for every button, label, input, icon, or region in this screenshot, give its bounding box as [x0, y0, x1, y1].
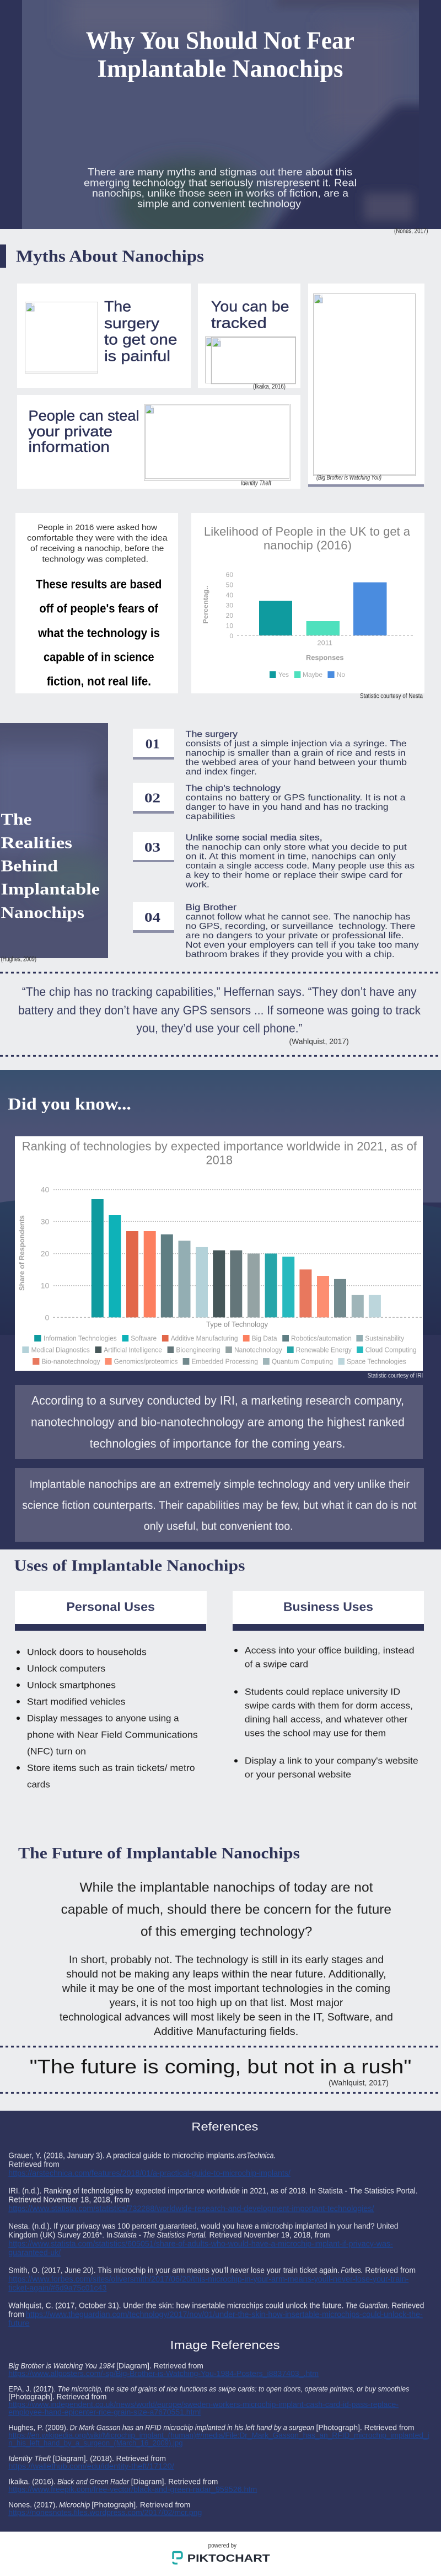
- image reference: Nones: [Photograph]. Retrieved from: [92, 2500, 190, 2509]
- y axis labels: 20: [41, 1249, 50, 1258]
- list: business uses: Access into your office building, instead: [245, 1645, 415, 1656]
- image reference: Hughes: n_his_left_hand_by_a_surgeon_(March_16_2009).jpg: [8, 2438, 183, 2447]
- chart title: Ranking of technologies by expected importance worldwide in 2021, as of: [22, 1140, 417, 1153]
- myth text: [104, 298, 177, 364]
- panel: private information myth: [17, 395, 300, 489]
- x axis label: 2011: [318, 639, 332, 647]
- panel: personal uses header: [15, 1591, 207, 1631]
- callout: IRI survey: According to a survey conducted by IRI, a marketing research company,: [31, 1394, 404, 1408]
- reference: IRI: https://www.statista.com/statistics/732288/worldwide-research-and-development-important-technologies/: [8, 2204, 374, 2213]
- y axis labels: [226, 571, 233, 640]
- reference: Nesta: https://www.statista.com/statistics/605051/share-of-adults-who-would-have-a-microchip-implant-if-privacy-was-: [8, 2239, 393, 2248]
- reference: Smith: [8, 2265, 416, 2292]
- reality 02: danger to have in you hand and has no tracking: [186, 803, 389, 812]
- image reference: Identity Theft: [8, 2454, 174, 2470]
- title: Why You Should Not Fear: [86, 26, 354, 54]
- list: personal uses: cards: [27, 1779, 50, 1790]
- reference: Smith: Retrieved from: [365, 2265, 416, 2275]
- image reference: Nones: https://nonesnotes.files.wordpress.com/2017/02/mcr.png: [8, 2508, 202, 2516]
- y axis labels: 0: [229, 632, 233, 640]
- callout: simple technology: science fiction counterparts. Their capabilities may be few, but what it can do is not: [22, 1500, 417, 1512]
- x axis title: Type of Technology: [206, 1319, 268, 1328]
- heading: references: References: [191, 2121, 258, 2134]
- image reference: EPA: The microchip, the size of grains of rice functions as swipe cards: to open doors, operate printers, or buy smoothies: [58, 2384, 409, 2393]
- chart title: 2018: [206, 1153, 233, 1167]
- reference: Grauer: Grauer, Y. (2018, January 3). A practical guide to microchip implants.: [8, 2151, 236, 2160]
- survey intro text: technology was completed.: [42, 555, 148, 564]
- section title: [1, 810, 100, 922]
- reference: Smith: Forbes.: [341, 2265, 363, 2275]
- heading marker bar: [0, 244, 6, 268]
- y axis labels: 40: [41, 1185, 50, 1194]
- panel: business uses header: Business Uses: [283, 1600, 373, 1614]
- image reference: Identity Theft: https://wallethub.com/edu/identity-theft/17120/: [8, 2461, 174, 2470]
- reality 01: the webbed area of your hand between your thumb: [186, 758, 407, 767]
- survey intro text: of receiving a nanochip, before the: [30, 544, 164, 553]
- y axis labels: 10: [226, 622, 233, 630]
- list: personal uses: [17, 1647, 198, 1790]
- intro text: simple and convenient technology: [137, 198, 301, 209]
- list: personal uses: Unlock doors to households: [27, 1647, 147, 1658]
- image credit: (Ikaika, 2016): [253, 384, 286, 391]
- image credit: (Big Brother is Watching You): [316, 475, 381, 482]
- reference: Nesta: Statista - The Statistics Portal.: [114, 2230, 207, 2240]
- reality 01: consists of just a simple injection via a syringe. The: [186, 739, 407, 749]
- image credit: Identity Theft: [241, 480, 272, 487]
- image reference: Hughes: Dr Mark Gasson has an RFID microchip implanted in his left hand by a surgeon: [69, 2423, 314, 2431]
- image credit: (Nones, 2017): [394, 228, 428, 235]
- reality 04: bathroom brakes if they provide you with a chip.: [186, 950, 395, 959]
- reality 04: 04: [144, 911, 160, 925]
- legend: Quantum Computing: [272, 1357, 333, 1365]
- list: personal uses: Unlock smartphones: [27, 1680, 116, 1691]
- legend: No: [337, 671, 345, 678]
- myth text: [29, 409, 139, 455]
- y axis labels: 40: [226, 591, 233, 599]
- heading: myths: Myths About Nanochips: [16, 246, 204, 265]
- survey emphasis text: off of people's fears of: [39, 602, 158, 616]
- image reference: Big Brother: https://www.allposters.com/-sp/Big-Brother-is-Watching-You-1984-Posters_i8837403_.htm: [8, 2369, 319, 2377]
- bar chart: likelihood of getting a nanochip: [191, 513, 424, 693]
- reference: Wahlquist: https://www.theguardian.com/technology/2017/nov/01/under-the-skin-how-insertable-microchips-could-unlock-the-: [26, 2310, 423, 2319]
- panel: business uses header: [233, 1591, 424, 1631]
- future question: capable of much, should there be concern for the future: [61, 1902, 391, 1917]
- reference: Smith: https://www.forbes.com/sites/oliversmith/2017/06/20/this-microchip-in-your-arm-means-youll-never-lose-your-train-: [8, 2274, 408, 2284]
- survey emphasis text: fiction, not real life.: [47, 675, 151, 688]
- panel: survey explanation: [15, 513, 178, 693]
- myth text: is painful: [104, 348, 170, 364]
- image reference: Identity Theft: [Diagram]. (2018). Retrieved from: [53, 2454, 166, 2462]
- legend: Sustainability: [365, 1334, 405, 1342]
- reference: Wahlquist: from: [8, 2310, 24, 2319]
- legend: Cloud Computing: [365, 1345, 417, 1354]
- image reference: Identity Theft: Identity Theft: [8, 2454, 51, 2462]
- list: business uses: Display a link to your company's website: [245, 1756, 418, 1766]
- list: personal uses: Store items such as train tickets/ metro: [27, 1763, 195, 1773]
- legend: [270, 671, 345, 678]
- icon: piktochart logo: [173, 2552, 182, 2564]
- intro text: emerging technology that seriously misrepresent it. Real: [84, 177, 357, 188]
- image reference: EPA: EPA, J. (2017).: [8, 2384, 56, 2393]
- list: personal uses: Unlock computers: [27, 1664, 105, 1674]
- image reference: Big Brother: Big Brother is Watching You 1984: [8, 2361, 115, 2370]
- legend: Robotics/automation: [291, 1334, 352, 1342]
- legend: Information Technologies: [44, 1334, 117, 1342]
- image reference: EPA: https://www.independent.co.uk/news/world/europe/sweden-workers-microchip-implant-cash-card-id-pass-replace-: [8, 2399, 399, 2408]
- reality 04: [133, 902, 419, 959]
- list: personal uses: Start modified vehicles: [27, 1697, 125, 1707]
- reality 04: no GPS, recording, or surveillance technology. There: [186, 922, 416, 931]
- y axis labels: 30: [226, 601, 233, 609]
- footer: powered by piktochart: powered by: [208, 2541, 236, 2549]
- image reference: Hughes: https://en.wikipedia.org/wiki/Microchip_implant_(human)#/media/File:Dr_Mark_Gasson_has_an_RFID_microchip_implanted_i: [8, 2430, 429, 2439]
- reality 02: 02: [144, 792, 160, 806]
- myth text: tracked: [211, 314, 267, 331]
- future answer text: In short, probably not. The technology is still in its early stages and: [69, 1954, 384, 1966]
- reality 01: The surgery: [186, 730, 238, 739]
- future answer text: while it may be one of the most important technologies in the coming: [62, 1982, 390, 1995]
- panel: surgery myth: [17, 284, 191, 388]
- future answer text: should not be making any leaps within the near future. Additionally,: [66, 1968, 386, 1980]
- reality 04: Not even your employers can tell if you take too many: [186, 940, 419, 950]
- myth text: to get one: [104, 331, 177, 348]
- future question: of this emerging technology?: [141, 1924, 312, 1939]
- image reference: Big Brother: [8, 2361, 319, 2377]
- myth text: You can be: [211, 298, 289, 314]
- legend: Big Data: [252, 1334, 277, 1342]
- legend: Renewable Energy: [296, 1345, 352, 1354]
- y axis title: Percentag..: [202, 586, 209, 624]
- bars: [259, 582, 387, 635]
- reality 03: [133, 832, 415, 889]
- legend: Additive Manufacturing: [171, 1334, 238, 1342]
- section title: Implantable: [1, 880, 100, 899]
- legend: Artificial Intelligence: [104, 1345, 162, 1354]
- list: business uses: Students could replace university ID: [245, 1687, 400, 1697]
- list: business uses: uses the school may use for them: [245, 1728, 386, 1739]
- chart credit: Statistic courtesy of IRI: [368, 1372, 423, 1379]
- reality 04: cannot follow what he cannot see. The nanochip has: [186, 912, 411, 922]
- image reference: EPA: [8, 2384, 409, 2416]
- heading: image references: Image References: [170, 2339, 280, 2351]
- image credit: (Hughes, 2009): [1, 956, 36, 963]
- heading: uses: Uses of Implantable Nanochips: [14, 1557, 245, 1574]
- section background: did you know: [0, 1070, 441, 1549]
- bar chart: ranking of technologies: [15, 1136, 423, 1371]
- reality 03: work.: [185, 880, 209, 889]
- legend: Bioengineering: [176, 1345, 220, 1354]
- reality 01: [133, 729, 407, 777]
- heading: future: The Future of Implantable Nanochips: [18, 1845, 300, 1862]
- reality 02: contains no battery or GPS functionality. It is not a: [186, 793, 406, 803]
- y axis labels: 10: [41, 1281, 50, 1290]
- myth text: surgery: [104, 315, 160, 332]
- reality 04: Big Brother: [186, 903, 236, 912]
- reality 03: 03: [144, 841, 160, 855]
- quote credit: (Wahlquist, 2017): [289, 1036, 349, 1045]
- section title: The: [1, 810, 32, 829]
- myth text: The: [104, 298, 131, 314]
- chart credit: Statistic courtesy of Nesta: [360, 693, 423, 699]
- image reference: Ikaika: https://www.freepik.com/free-vector/black-and-green-radar_959526.htm: [8, 2484, 257, 2493]
- y axis labels: 0: [45, 1313, 50, 1322]
- reality 01: 01: [146, 737, 160, 752]
- chart title: [22, 1140, 417, 1167]
- image reference: Ikaika: [8, 2477, 257, 2493]
- y axis labels: 30: [41, 1217, 50, 1226]
- section title: Nanochips: [1, 904, 84, 922]
- reference: IRI: Retrieved November 18, 2018, from: [8, 2195, 130, 2204]
- list: business uses: or your personal website: [245, 1770, 351, 1780]
- pull quote: tracking: [18, 985, 421, 1035]
- image reference: Ikaika: [Diagram]. Retrieved from: [131, 2477, 218, 2486]
- chart title: nanochip (2016): [263, 538, 352, 552]
- myth text: your private: [29, 424, 112, 440]
- reality 02: capabilities: [186, 812, 235, 821]
- title: [86, 26, 354, 82]
- reality 04: are no dangers to your private or professional life.: [186, 931, 404, 940]
- legend: Yes: [278, 671, 289, 678]
- legend: Bio-nanotechnology: [42, 1357, 100, 1365]
- image reference: Nones: Nones. (2017).: [8, 2500, 57, 2509]
- reference: Nesta: Nesta. (n.d.). If your privacy was 100 percent guaranteed, would you have a microchip implanted in your hand? United: [8, 2221, 398, 2231]
- legend: [22, 1334, 417, 1365]
- future question: [61, 1880, 391, 1939]
- reference: Grauer: https://arstechnica.com/features/2018/01/a-practical-guide-to-microchip-implants/: [8, 2168, 291, 2178]
- legend: Genomics/proteomics: [114, 1357, 178, 1365]
- legend: Nanotechnology: [234, 1345, 282, 1354]
- legend: Maybe: [303, 671, 322, 678]
- reference: Nesta: guaranteed-uk/: [8, 2248, 61, 2257]
- list: personal uses: (NFC) turn on: [27, 1746, 86, 1757]
- image reference: Nones: Microchip: [59, 2500, 90, 2509]
- reference: Wahlquist: Wahlquist, C. (2017, October 31). Under the skin: how insertable microchips could unlock the future.: [8, 2301, 344, 2310]
- survey emphasis text: capable of in science: [44, 650, 154, 664]
- callout: IRI survey: technologies of importance for the coming years.: [90, 1437, 346, 1451]
- pull quote: tracking: battery and they don’t have any GPS sensors ... If someone was going to track: [18, 1003, 421, 1017]
- reference: IRI: [8, 2186, 418, 2213]
- legend: Software: [131, 1334, 157, 1342]
- bars: [92, 1199, 381, 1317]
- myth text: information: [29, 440, 110, 455]
- callout: IRI survey: [15, 1385, 423, 1459]
- reality 03: Unlike some social media sites,: [186, 833, 322, 842]
- reference: Wahlquist: The Guardian.: [345, 2301, 390, 2310]
- future question: While the implantable nanochips of today are not: [79, 1880, 373, 1895]
- y axis labels: 60: [226, 571, 233, 579]
- reality 01: nanochip is smaller than a grain of rice and rests in: [186, 749, 406, 758]
- survey intro text: [27, 523, 168, 564]
- reference: Nesta: Kingdom (UK) Survey 2016*. In: [8, 2230, 112, 2240]
- panel: personal uses header: Personal Uses: [66, 1600, 155, 1614]
- reference: Smith: Smith, O. (2017, June 20). This microchip in your arm means you'll never lose your train ticket again.: [8, 2265, 340, 2275]
- reference: Smith: ticket-again/#6d9a75c01c43: [8, 2283, 106, 2292]
- image reference: Big Brother: [Diagram]. Retrieved from: [116, 2361, 203, 2370]
- image reference: Nones: [8, 2500, 202, 2516]
- list: business uses: [234, 1645, 418, 1780]
- survey emphasis text: what the technology is: [37, 626, 160, 640]
- future answer text: [60, 1954, 393, 2038]
- callout: IRI survey: nanotechnology and bio-nanotechnology are among the highest ranked: [31, 1415, 405, 1429]
- quote credit: (Wahlquist, 2017): [329, 2078, 389, 2087]
- future answer text: technological advances will most likely be seen in the IT, Software, and: [60, 2011, 393, 2023]
- legend: Embedded Processing: [191, 1357, 258, 1365]
- image reference: Hughes: [8, 2423, 429, 2447]
- x axis title: Responses: [306, 654, 344, 662]
- list: personal uses: Display messages to anyone using a: [27, 1713, 179, 1724]
- references panel: [0, 2111, 441, 2532]
- list: business uses: dining hall access, and whatever other: [245, 1714, 408, 1725]
- panel: big brother image: [308, 284, 424, 487]
- title: Implantable Nanochips: [97, 54, 343, 82]
- chart title: Likelihood of People in the UK to get a: [204, 525, 411, 538]
- list: business uses: swipe cards with them for dorm access,: [245, 1701, 413, 1711]
- legend: Space Technologies: [347, 1357, 406, 1365]
- pull quote: tracking: you, they’d use your cell phone.”: [136, 1022, 302, 1035]
- reality 02: [133, 783, 406, 821]
- reality 01: and index finger.: [186, 767, 257, 777]
- section title: Realities: [1, 833, 72, 852]
- callout: simple technology: only useful, but convenient too.: [144, 1521, 293, 1533]
- panel: tracking myth: [198, 284, 300, 391]
- survey intro text: People in 2016 were asked how: [37, 523, 158, 532]
- reality 03: on it. At this moment in time, nanochips can only: [186, 852, 396, 861]
- heading: did you know: Did you know...: [8, 1094, 131, 1114]
- survey emphasis text: These results are based: [36, 578, 162, 591]
- footer: powered by piktochart: [0, 2532, 441, 2576]
- callout: simple technology: [15, 1468, 424, 1542]
- section title: Behind: [1, 857, 58, 875]
- hero panel: [0, 0, 441, 250]
- reference: Wahlquist: Retrieved: [391, 2301, 424, 2310]
- callout: simple technology: Implantable nanochips are an extremely simple technology and very unlike their: [30, 1479, 410, 1491]
- reference: Wahlquist: [8, 2301, 424, 2328]
- reality 03: contain a single access code. Many people use this as: [186, 861, 415, 870]
- intro text: [84, 167, 357, 209]
- survey emphasis text: [36, 578, 162, 688]
- myth text: [211, 298, 289, 331]
- image reference: Ikaika: Black and Green Radar: [57, 2477, 130, 2486]
- pull quote: tracking: “The chip has no tracking capabilities,” Heffernan says. “They don’t have any: [22, 985, 417, 999]
- reference: Grauer: [8, 2151, 291, 2178]
- image reference: EPA: employee-hand-epicenter-rice-grain-size-a7670551.html: [8, 2407, 201, 2416]
- reality 03: the nanochip can only store what you decide to put: [186, 842, 407, 852]
- list: business uses: of a swipe card: [245, 1659, 308, 1670]
- intro text: There are many myths and stigmas out there about this: [88, 167, 352, 178]
- future answer text: Additive Manufacturing fields.: [154, 2025, 298, 2038]
- y axis title: Share of Respondents: [18, 1215, 26, 1291]
- y axis labels: 50: [226, 581, 233, 589]
- footer: powered by piktochart: PIKTOCHART: [187, 2553, 270, 2564]
- reference: Nesta: [8, 2221, 398, 2257]
- future answer text: years, it is not too high up on that list. Most major: [109, 1997, 343, 2009]
- reality 03: a key to their home or replace their swipe card for: [186, 870, 402, 880]
- image reference: Hughes: [Photograph]. Retrieved from: [316, 2423, 415, 2431]
- legend: Medical Diagnostics: [31, 1345, 90, 1354]
- image reference: Ikaika: Ikaika. (2016).: [8, 2477, 56, 2486]
- reference: Grauer: Retrieved from: [8, 2160, 60, 2169]
- panel: realities image with title: [0, 723, 113, 958]
- y axis labels: [41, 1185, 50, 1322]
- chart title: [204, 525, 411, 552]
- reality 02: The chip's technology: [186, 784, 281, 793]
- image reference: Hughes: Hughes, P. (2009).: [8, 2423, 68, 2431]
- list: personal uses: phone with Near Field Communications: [27, 1730, 198, 1740]
- y axis labels: 20: [226, 612, 233, 619]
- reference: Grauer: arsTechnica.: [237, 2151, 276, 2160]
- reference: Nesta: Retrieved November 19, 2018, from: [209, 2230, 330, 2240]
- image reference: EPA: [Photograph]. Retrieved from: [8, 2392, 106, 2401]
- pull quote: future: "The future is coming, but not in a rush": [30, 2056, 411, 2077]
- survey intro text: comfortable they were with the idea: [27, 534, 168, 543]
- myth text: People can steal: [29, 409, 139, 424]
- reference: Wahlquist: future: [8, 2318, 30, 2328]
- intro text: nanochips, unlike those seen in works of fiction, are a: [92, 188, 349, 199]
